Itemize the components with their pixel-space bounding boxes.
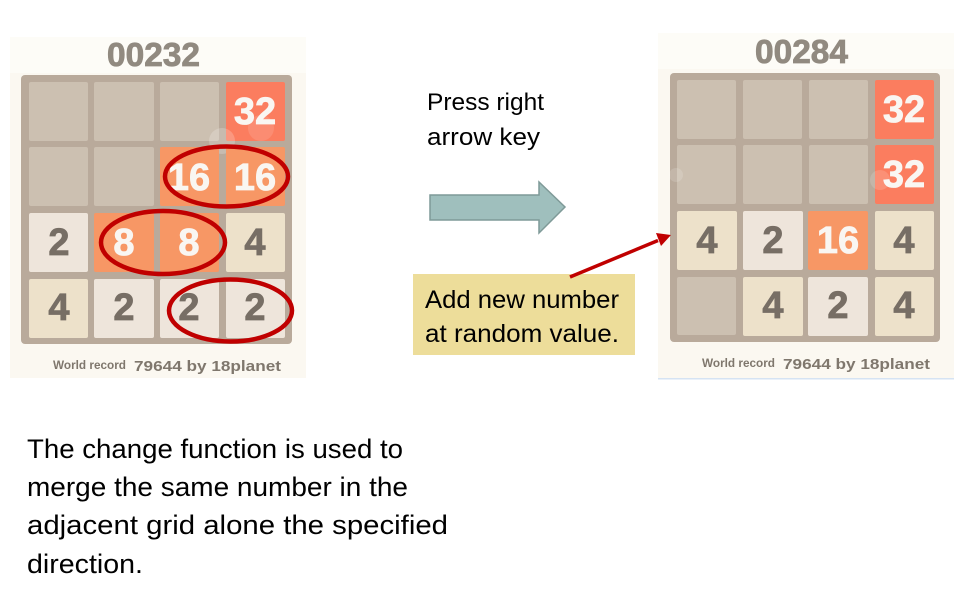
- score after: 00284: [755, 33, 849, 70]
- panel: game board before move: 2: [113, 287, 135, 329]
- panel: game board after move: 2: [762, 220, 784, 262]
- panel: game board before move: 8: [113, 222, 135, 264]
- panel: game board after move: 32: [883, 154, 925, 196]
- description text: direction.: [27, 549, 143, 579]
- world record after: [702, 356, 930, 373]
- panel: game board before move: 32: [234, 91, 276, 133]
- instruction text: [427, 89, 544, 151]
- panel: game board after move: 2: [827, 285, 849, 327]
- panel: game board before move: 16: [168, 157, 210, 199]
- panel: game board before move: 4: [48, 287, 70, 329]
- score before: 00232: [107, 36, 200, 73]
- callout: add new number: [413, 274, 635, 355]
- world record after: 79644 by 18planet: [783, 356, 930, 373]
- instruction text: arrow key: [427, 124, 540, 151]
- panel: game board after move: 32: [883, 89, 925, 131]
- description text: [27, 434, 448, 579]
- panel: game board before move: 4: [244, 222, 266, 264]
- description text: adjacent grid alone the specified: [27, 510, 448, 540]
- panel: game board before move: 16: [234, 157, 276, 199]
- world record before: [53, 358, 281, 375]
- panel: game board before move: 8: [178, 222, 200, 264]
- description text: merge the same number in the: [27, 472, 408, 502]
- panel: game board before move: 2: [244, 287, 266, 329]
- panel: game board after move: 4: [893, 285, 915, 327]
- arrow: right: [430, 182, 565, 233]
- arrow: callout to new tile: [570, 233, 671, 277]
- description text: The change function is used to: [27, 434, 403, 464]
- callout ellipse: 2 and 2: [169, 280, 292, 342]
- panel: game board after move: 16: [817, 220, 859, 262]
- world record after: World record: [702, 356, 775, 370]
- callout: add new number: at random value.: [425, 320, 619, 348]
- panel: game board after move: 4: [893, 220, 915, 262]
- panel: game board before move: [10, 36, 306, 378]
- panel: game board before move: 2: [48, 222, 70, 264]
- callout ellipse: 16 and 16: [165, 146, 288, 206]
- panel: game board before move: 2: [178, 287, 200, 329]
- callout ellipse: 8 and 8: [101, 211, 225, 274]
- panel: game board after move: 4: [762, 285, 784, 327]
- world record before: 79644 by 18planet: [134, 358, 281, 375]
- panel: game board after move: [658, 33, 954, 380]
- callout: add new number: Add new number: [425, 286, 619, 314]
- instruction text: Press right: [427, 89, 544, 116]
- panel: game board after move: 4: [696, 220, 718, 262]
- world record before: World record: [53, 358, 126, 372]
